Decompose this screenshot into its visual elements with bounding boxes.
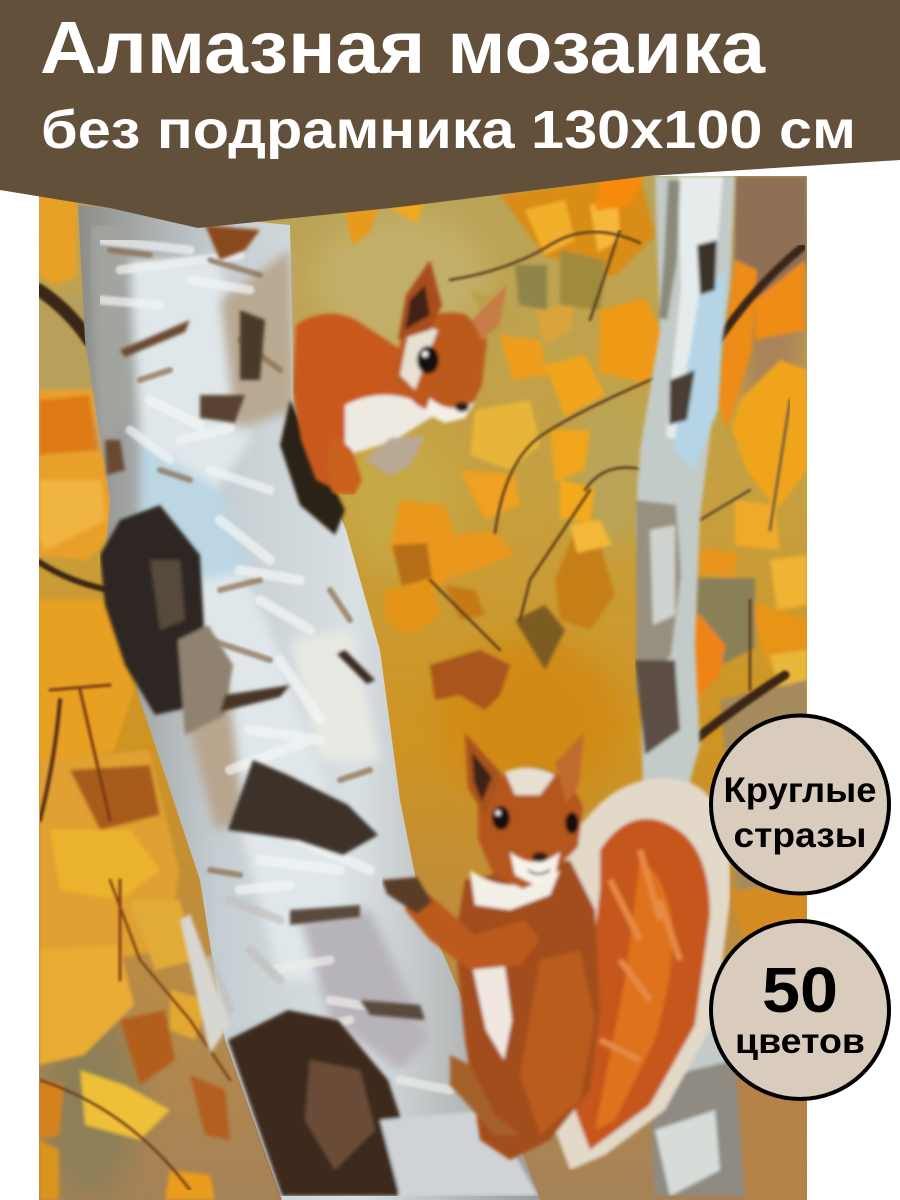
left side leaves <box>39 196 77 286</box>
ears <box>398 260 442 340</box>
foliage branches <box>40 230 790 1190</box>
autumn foliage <box>39 176 807 1200</box>
soft background colour patches <box>39 180 807 1200</box>
badge: 50 colours <box>711 921 889 1099</box>
belly <box>345 395 435 455</box>
header banner <box>0 0 900 228</box>
nose <box>532 852 548 862</box>
badge: round rhinestones: Круглые <box>724 771 876 810</box>
eyes <box>492 806 510 830</box>
head <box>392 312 487 420</box>
tail <box>555 778 730 1170</box>
nose <box>455 402 469 412</box>
paw <box>382 877 432 914</box>
title: Алмазная мозаика <box>40 6 766 89</box>
painted autumn background <box>39 176 807 1200</box>
white chest <box>472 960 512 1060</box>
right side leaves <box>735 176 807 326</box>
small birch tree <box>635 176 745 1196</box>
large birch trunk <box>78 205 540 1200</box>
paw right <box>365 436 425 476</box>
badge: round rhinestones: стразы <box>734 816 866 855</box>
badge: 50 colours: цветов <box>735 1022 865 1061</box>
badge: round rhinestones <box>711 716 889 894</box>
upper squirrel <box>293 260 507 495</box>
lower right background patches <box>720 680 807 890</box>
eye <box>417 346 439 374</box>
ears <box>465 733 501 818</box>
head <box>478 767 583 889</box>
body <box>455 860 600 1160</box>
upper right leaves <box>345 176 667 710</box>
arm <box>405 890 540 970</box>
dark bark patches <box>100 225 538 1196</box>
neck <box>470 870 560 910</box>
tail fur strokes <box>600 850 680 1060</box>
dark left branches <box>39 245 805 760</box>
body <box>293 314 416 490</box>
subtitle: без подрамника 130х100 см <box>41 100 856 160</box>
paw left <box>328 442 364 495</box>
lower squirrel <box>382 733 730 1170</box>
trunk highlights <box>90 225 430 1070</box>
bark brush dabs <box>100 240 454 1096</box>
badge: 50 colours: 50 <box>762 954 838 1026</box>
mouth <box>528 870 550 874</box>
painting: birch trees and squirrels <box>39 176 807 1200</box>
hind foot <box>450 1055 520 1135</box>
